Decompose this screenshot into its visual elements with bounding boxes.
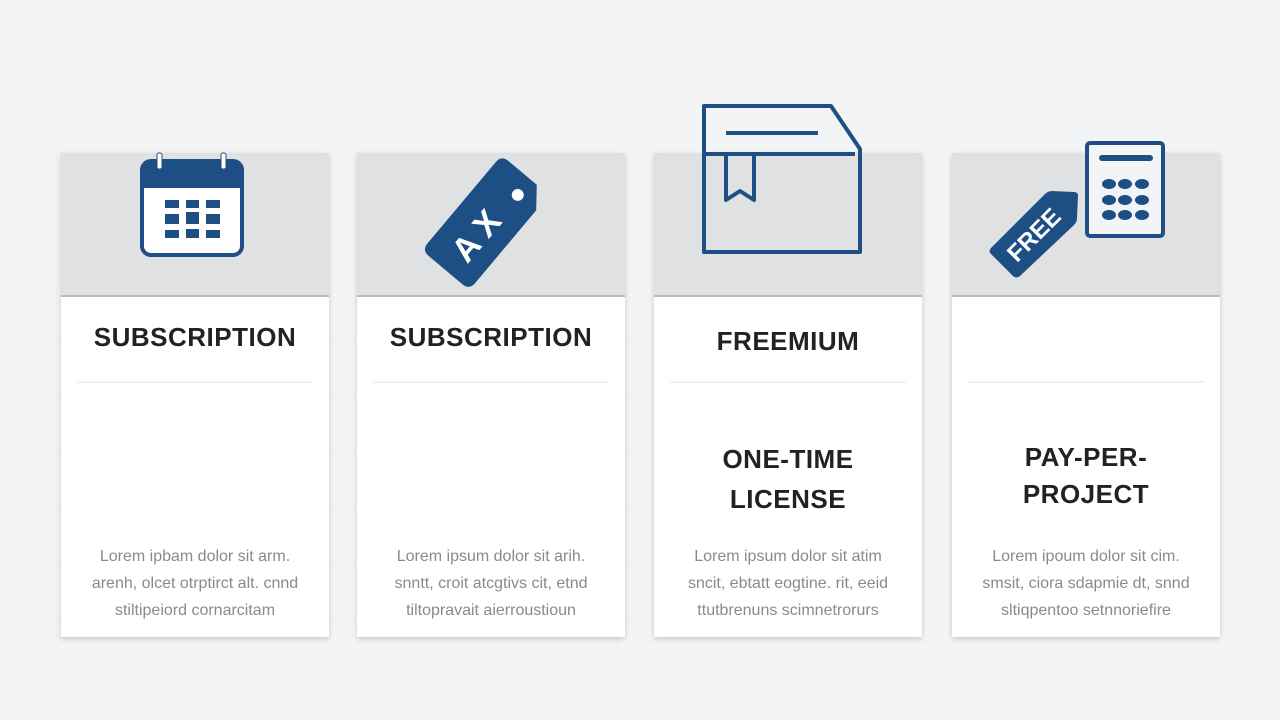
icon: calculator and free tag: FREE [1002,203,1067,268]
icon: price tag [424,158,537,287]
panel: card 4 pay-per-project [952,153,1220,637]
heading: one-time license: LICENSE [730,484,846,514]
panel: card 2 subscription [357,153,625,637]
text block: stiltipeiord cornarcitam [115,602,275,619]
heading: SUBSCRIPTION [390,322,592,352]
card 1 header [61,153,329,297]
heading: freemium: FREEMIUM [717,326,859,356]
text block [982,548,1190,619]
text block: tiltopravait aierroustioun [406,602,576,619]
text block: arenh, olcet otrptirct alt. cnnd [92,575,298,592]
card 3 header [654,153,922,297]
text block: Lorem ipbam dolor sit arm. [100,548,290,565]
heading [1023,442,1149,509]
card 2 header [357,153,625,297]
text block: ttutbrenuns scimnetrorurs [697,602,879,619]
text block: sncit, ebtatt eogtine. rit, eeid [688,575,888,592]
heading: PROJECT [1023,479,1149,509]
icon: calculator and free tag [990,141,1165,278]
heading: one-time license [722,444,854,514]
card 4 header [952,153,1220,297]
text block: Lorem ipsum dolor sit atim [694,548,882,565]
icon: price tag: A X [444,202,509,270]
text block: snntt, croit atcgtivs cit, etnd [395,575,587,592]
panel: card 3 freemium / one-time license [654,153,922,637]
text block: Lorem ipsum dolor sit arih. [397,548,585,565]
text block: smsit, ciora sdapmie dt, snnd [982,575,1190,592]
icon: box [702,104,862,254]
text block [688,548,888,619]
icon: calendar [140,152,244,257]
heading: one-time license: ONE-TIME [722,444,854,474]
text block [92,548,298,619]
text block: Lorem ipoum dolor sit cim. [992,548,1180,565]
text block: sltiqpentoo setnnoriefire [1001,602,1171,619]
text block [395,548,587,619]
heading: PAY-PER- [1025,442,1147,472]
heading: SUBSCRIPTION [94,322,296,352]
panel: card 1 subscription [61,153,329,637]
